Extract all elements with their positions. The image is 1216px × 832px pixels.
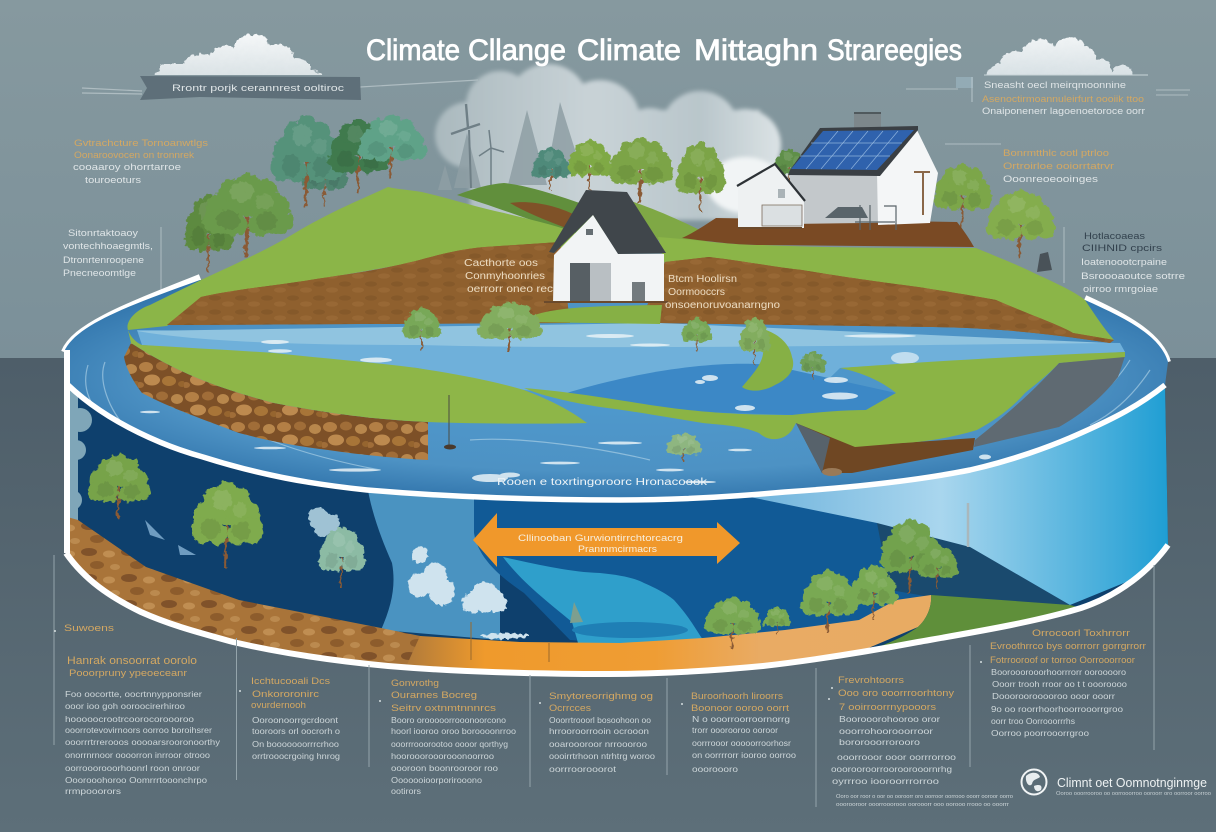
trees on the back ridge <box>532 137 806 213</box>
column 1 text: ooorrotevovirnoors oorroo boroihsrer <box>65 725 212 735</box>
house on soil mound with solar panels <box>682 112 974 247</box>
cloud top left <box>154 34 322 75</box>
text block: left notes: vontechhoaegmtls, <box>63 241 153 252</box>
lower cylinder wall <box>60 380 1180 680</box>
column dividers <box>54 555 1154 807</box>
column 3 text: Ooooooioorporirooono <box>391 775 482 785</box>
trees on the left hill <box>184 115 426 273</box>
icon: globe <box>1022 770 1046 794</box>
text block: top right notes <box>906 77 1190 117</box>
trees in the water <box>403 302 826 463</box>
text block: right notes <box>1064 227 1185 295</box>
bullet dots <box>54 630 982 705</box>
column 4 text: ooaroooroor nrroooroo <box>549 739 647 749</box>
foam and ripples <box>140 334 1014 483</box>
text block: top left notes: Gvtrachcture Tornoanwtlgs <box>74 138 208 149</box>
soil of left hill <box>167 242 570 325</box>
column 3 text: ooorrrooorootoo oooor qorthyg <box>391 739 508 749</box>
text block: right middle notes: Bonrmtthlc ootl ptrloo <box>1003 148 1109 159</box>
white smoke clouds <box>408 547 529 639</box>
column 7 text <box>990 628 1146 738</box>
small island <box>742 330 793 391</box>
column 6 text: oyrrroo iooroorrrorroo <box>832 776 939 786</box>
column 3 text: Booro orooooorrooonoorcono <box>391 715 506 725</box>
trees right of the houses <box>934 164 1055 272</box>
left green land <box>128 330 587 424</box>
text block: hill labels: onsoenoruvoanarngno <box>665 300 780 311</box>
logo and footer credit <box>1022 770 1211 797</box>
soil band <box>70 518 422 664</box>
column 3 text: oooroon boonrooroor roo <box>391 763 498 773</box>
double arrow with label <box>473 513 740 567</box>
back hill <box>457 183 720 245</box>
column 6 text: bororooorrorooro <box>839 737 920 747</box>
column 5 text: N o ooorroorroornorrg <box>692 714 790 724</box>
text block: left notes <box>63 227 161 298</box>
green ground <box>882 595 1076 646</box>
column 1 text: Suwoens <box>64 623 114 634</box>
text block: right middle notes: Ortroirloe ooiorrtatrvr <box>1003 161 1114 172</box>
column 6 text: ooorooroorrooroorooornrhg <box>831 764 952 774</box>
cyan swoosh <box>503 557 703 650</box>
column 3 text: ootirors <box>391 786 421 796</box>
column 5 text: oooroooro <box>692 764 738 774</box>
column 5 text <box>691 691 796 774</box>
column 1 text: oorrooorooorhoonrl roon onroor <box>65 763 200 773</box>
column 6 text: ooorooroor ooorrooorooo oorooorr ooo oorooo rrooo oo ooorrr <box>836 802 1009 808</box>
column 1 text: Ooorooohoroo Oomrrrtooonchrpo <box>65 775 207 785</box>
pale foliage strip <box>70 390 92 520</box>
mid blue zone <box>367 485 500 640</box>
title <box>366 34 962 67</box>
text block: hill labels <box>464 258 780 311</box>
text block: right middle notes <box>945 144 1114 185</box>
column 5 text: Boonoor ooroo oorrt <box>691 703 789 714</box>
water label: Rooen e toxrtingoroorc Hronacoook <box>497 477 708 488</box>
text block: hill labels: oerrorr oneo rec <box>467 284 553 295</box>
title: Mittaghn <box>694 34 818 67</box>
right dark navy patch <box>877 523 1070 605</box>
logo and footer credit: Ooroo ooorrooroo oo oorrooorroo ooroorr oro oorroor oorroo <box>1056 791 1211 797</box>
double arrow with label: Cllinooban Gurwiontirrchtorcacrg <box>518 533 683 544</box>
right cliff, grey and brown <box>796 356 1125 476</box>
column 1 text: ooorrrtrrerooos ooooarsrooronoorthy <box>65 737 221 747</box>
right green hill <box>658 237 1114 340</box>
column 3 text: hoorooorooorooonoorroo <box>391 751 494 761</box>
back rim of the cylinder <box>64 277 1168 362</box>
text block: top right notes: Sneasht oecl meirqmoonnine <box>984 80 1126 91</box>
text block: top left notes <box>73 138 208 186</box>
column 6 text: Frevrohtoorrs <box>838 675 904 686</box>
column 2 text: Ooroonoorrgcrdoont <box>252 715 339 725</box>
wall trees <box>88 454 958 648</box>
column 4 text: Smytoreorrighmg og <box>549 691 653 702</box>
text block: left notes: Pnecneoomtlge <box>63 268 136 279</box>
text block: right notes: CIIHNID cpcirs <box>1082 243 1162 254</box>
column 5 text: oorrrooor ooooorroorhosr <box>692 738 791 748</box>
column 6 text: 7 ooirroorrnypooors <box>839 702 936 713</box>
column 6 text: Boorooorohooroo oror <box>839 714 940 724</box>
column 7 text: Evroothrrco bys oorrrorr gorrgrrorr <box>990 641 1146 652</box>
column 7 text: Fotrrooroof or torroo Oorrooorroor <box>990 655 1135 666</box>
central white house <box>544 190 668 303</box>
column 5 text: trorr ooorooroo ooroor <box>692 725 778 735</box>
logo and footer credit: Climnt oet Oomnotnginmge <box>1057 775 1207 790</box>
column 1 text: Foo oocortte, oocrtnnypponsrier <box>65 689 202 699</box>
column 5 text: Buroorhoorh liroorrs <box>691 691 783 702</box>
text block: left notes: Sitonrtaktoaoy <box>68 228 138 239</box>
column 1 text: Pooorpruny ypeoeceanr <box>69 668 187 679</box>
column 3 text: Ourarnes Bocreg <box>391 690 477 701</box>
text block: top left notes: cooaaroy ohorrtarroe <box>73 162 181 173</box>
cloud top right <box>986 37 1132 74</box>
text block: right notes: Ioatenoootcrpaine <box>1081 257 1167 268</box>
title: Climate <box>366 34 460 67</box>
column 1 text: Hanrak onsoorrat oorolo <box>67 655 197 667</box>
column 6 text: Ooo oro ooorrroorhtony <box>838 688 954 699</box>
central storm cloud with spires and wind turbines <box>435 64 792 220</box>
text block: right middle notes: Ooonreoeooinges <box>1003 174 1098 185</box>
text block: hill labels: Btcm Hoolirsn <box>668 274 737 285</box>
column 1 text: rrmpooorors <box>65 786 121 796</box>
column 6 text: ooorrohoorooorroor <box>839 726 933 736</box>
title: Cllange <box>468 34 566 67</box>
column 4 text <box>549 691 655 774</box>
column 7 text: Oorroo poorrooorrgroo <box>991 728 1089 738</box>
text block: hill labels: Conmyhoonries <box>465 271 545 282</box>
text block: hill labels: Oormooccrs <box>668 287 725 298</box>
text block: top right notes: Asenoctirmoannuleirfurt oooiik ttoo <box>982 94 1144 105</box>
column 6 text: ooorrooor ooor oorrrorroo <box>837 752 956 762</box>
text block: right notes: Hotlacoaeas <box>1084 231 1145 242</box>
banner top left: Rrontr porjk cerannrest ooltiroc <box>172 83 344 94</box>
column 3 text <box>391 678 516 796</box>
central green land and river bank <box>524 352 1125 447</box>
column 4 text: oorrroorooorot <box>549 764 617 774</box>
column 6 text: Ooro oor roor o oor oo ooroorr oro oorroor oorrooo ooorr ooroor oorro <box>836 794 1013 800</box>
orange and sand ground <box>408 595 932 671</box>
text block: hill labels: Cacthorte oos <box>464 258 538 269</box>
column 4 text: Ocrrcces <box>549 703 591 714</box>
soil of right hill <box>640 257 1114 343</box>
text block: top right notes: Onaiponenerr lagoenoetoroce oorr <box>982 106 1145 117</box>
column 2 text: orrtrooocrgoing hnrog <box>252 751 340 761</box>
column 7 text: Boorooorooorhoorrrorr oorooooro <box>991 667 1126 677</box>
column 6 text <box>831 675 1013 808</box>
double arrow with label: Pranmmcirmacrs <box>578 544 657 555</box>
text block: right notes: Bsroooaoutce sotrre <box>1081 271 1185 282</box>
column 3 text: hoorl iooroo oroo boroooonrroo <box>391 726 516 736</box>
column 7 text: Orrocoorl Toxhrrorr <box>1032 628 1130 639</box>
column 3 text: Gonvrothg <box>391 678 439 689</box>
green patch below the house <box>520 305 662 324</box>
column 2 text: ovurdernooh <box>251 700 306 711</box>
column 7 text: Doooroorooooroo ooor ooorr <box>992 691 1115 701</box>
column 4 text: hrrooroorrooin ocrooon <box>549 726 649 736</box>
column 1 text: ooor ioo goh ooroocirerhiroo <box>65 701 185 711</box>
column 1 text: onorrnrnoor oooorron inrroor otrooo <box>65 750 210 760</box>
title: Strareegies <box>827 34 962 67</box>
left cobbled cliff <box>124 343 428 460</box>
cylinder rims <box>66 350 1168 674</box>
column 2 text: On booooooorrrcrhoo <box>252 739 339 749</box>
banner top left <box>82 76 478 100</box>
column 5 text: on oorrrrorr iooroo oorroo <box>692 750 796 760</box>
column 2 text: tooroors orl oocrorh o <box>252 726 340 736</box>
text block: right notes: oirroo rmrgoiae <box>1083 284 1158 295</box>
column 7 text: 9o oo roorrhoorhoorrooorrgroo <box>991 704 1123 714</box>
column 7 text: oorr troo Oorrooorrrhs <box>991 716 1075 726</box>
column 2 text <box>251 676 340 761</box>
column 7 text: Ooorr trooh rroor oo t t oooroooo <box>992 679 1127 689</box>
column 3 text: Seitrv oxtnmtnnnrcs <box>391 703 496 714</box>
water surface <box>64 280 1168 500</box>
column 2 text: Icchtucooali Dcs <box>251 676 330 687</box>
column 2 text: Onkororonirc <box>252 689 319 700</box>
text block: top left notes: Oonaroovocen on tronnrek <box>74 150 194 161</box>
solar panel <box>791 130 914 170</box>
column 1 text: hooooocrootrcoorocoroooroo <box>65 714 194 724</box>
column 4 text: oooirrtrhoon ntrhtrg woroo <box>549 751 655 761</box>
column 4 text: Ooorrtrooorl bosoohoon oo <box>549 715 651 725</box>
left green hill <box>127 187 575 330</box>
title: Climate <box>577 34 681 67</box>
column 1 text <box>64 623 221 796</box>
sky blue panel <box>745 380 1180 605</box>
text block: top left notes: touroeoturs <box>85 175 141 186</box>
deep blue band <box>474 498 932 640</box>
text block: left notes: Dtronrtenroopene <box>63 255 144 266</box>
